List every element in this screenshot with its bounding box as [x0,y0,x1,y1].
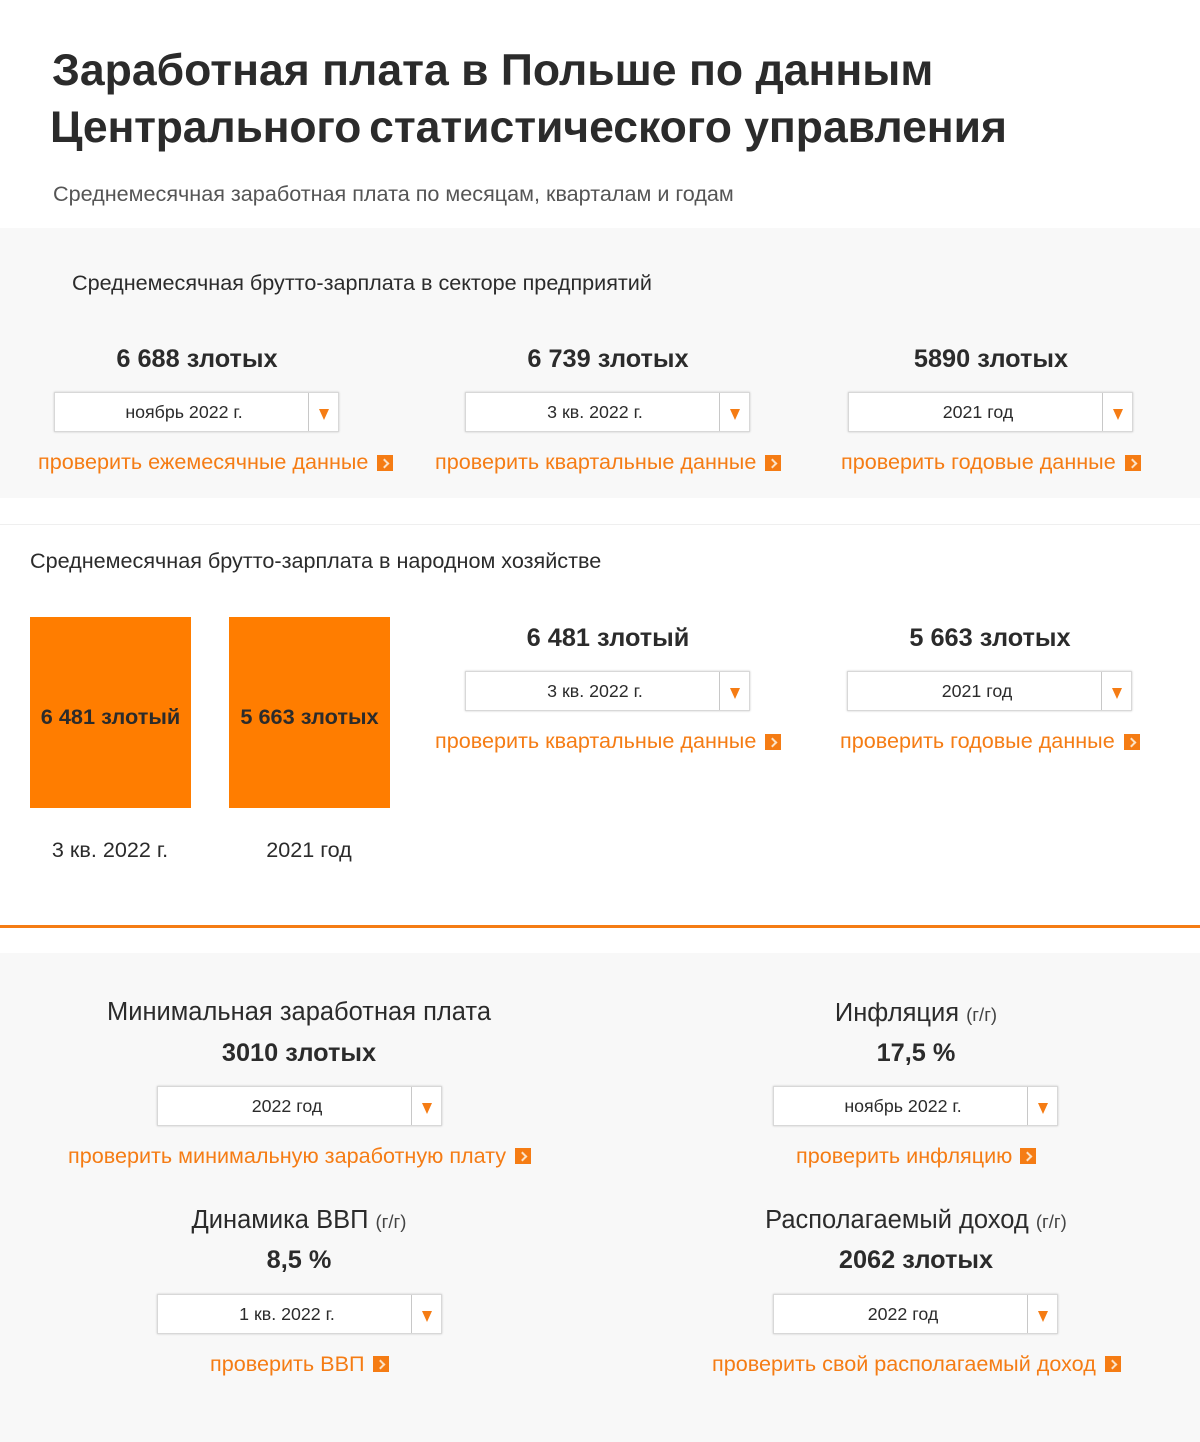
heading: minimum wage: Минимальная заработная плата [107,998,491,1026]
dropdown: inflation: ноябрь 2022 г. [844,1096,962,1116]
value: inflation: 17,5 % [877,1038,955,1066]
value: minimum wage: 3010 злотых [222,1038,376,1066]
heading: inflation: Инфляция (г/г) [835,998,997,1026]
heading: GDP: Динамика ВВП (г/г) [192,1206,406,1234]
bar label: 2021: 2021 год [266,837,352,862]
dropdown: quarterly [465,671,750,711]
dropdown: minimum wage: 2022 год [252,1096,322,1116]
dropdown: disposable income [773,1294,1058,1334]
link: GDP: проверить ВВП [210,1351,364,1376]
dropdown: quarterly: 3 кв. 2022 г. [547,402,643,422]
bar: Q3 2022: 6 481 злотый [41,704,180,729]
dropdown: disposable income: 2022 год [868,1304,938,1324]
dropdown: GDP: 1 кв. 2022 г. [239,1304,335,1324]
dropdown: minimum wage [157,1086,442,1126]
link: disposable income: проверить свой располагаемый доход [712,1351,1096,1376]
value: yearly: 5 663 злотых [909,624,1071,652]
subtitle: Среднемесячная заработная плата по месяцам, кварталам и годам [53,181,734,206]
panel: related indicators [0,953,1200,1442]
dropdown: GDP [157,1294,442,1334]
dropdown: yearly [848,392,1133,432]
value: quarterly: 6 739 злотых [527,344,689,372]
dropdown: quarterly: 3 кв. 2022 г. [547,681,643,701]
panel: national economy wages [0,524,1200,928]
dropdown: inflation [773,1086,1058,1126]
dropdown: monthly [54,392,339,432]
bar: 2021 [229,617,390,808]
value: yearly: 5890 злотых [914,344,1068,372]
dropdown: quarterly [465,392,750,432]
link: yearly: проверить годовые данные [841,449,1116,474]
link: quarterly: проверить квартальные данные [435,449,756,474]
title [50,46,1007,152]
value: quarterly: 6 481 злотый [527,624,689,652]
dropdown: yearly [847,671,1132,711]
title: Центральногостатистического управления [50,103,1007,152]
link: quarterly: проверить квартальные данные [435,728,756,753]
title: Заработная плата в Польше по данным [52,46,933,94]
dropdown: monthly: ноябрь 2022 г. [125,402,243,422]
panel heading: Среднемесячная брутто-зарплата в народном хозяйстве [30,548,601,573]
value: monthly: 6 688 злотых [116,344,278,372]
link: yearly: проверить годовые данные [840,728,1115,753]
dropdown: yearly: 2021 год [943,402,1013,422]
panel: enterprise sector wages [0,228,1200,498]
bar label: Q3 2022: 3 кв. 2022 г. [52,837,168,862]
link: inflation: проверить инфляцию [796,1143,1012,1168]
bar: Q3 2022 [30,617,191,808]
link: monthly: проверить ежемесячные данные [38,449,368,474]
value: disposable income: 2062 злотых [839,1246,993,1274]
value: GDP: 8,5 % [267,1246,331,1274]
panel heading: Среднемесячная брутто-зарплата в секторе предприятий [72,270,652,295]
dropdown: yearly: 2021 год [942,681,1012,701]
bar: 2021: 5 663 злотых [240,704,379,729]
link: minimum wage: проверить минимальную заработную плату [68,1143,506,1168]
heading: disposable income: Располагаемый доход (г/г) [765,1206,1067,1234]
